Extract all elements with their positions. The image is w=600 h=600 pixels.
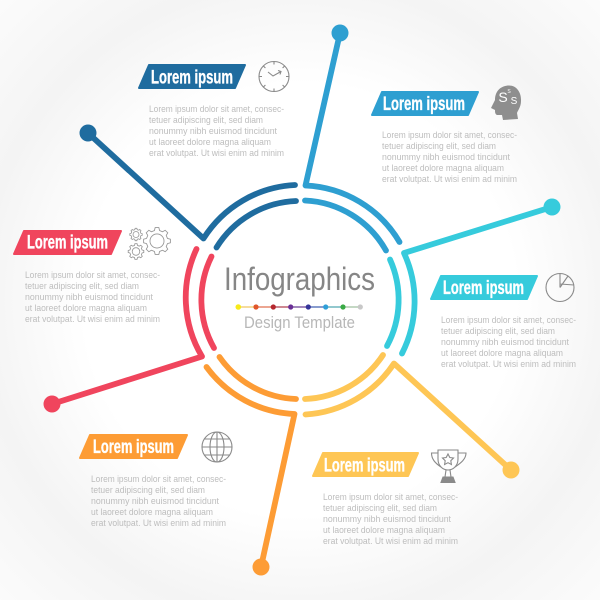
text block: [441, 315, 576, 370]
text block: nonummy nibh euismod tincidunt: [441, 337, 569, 348]
icon: gears: [128, 228, 170, 259]
text block: tetuer adipiscing elit, sed diam: [441, 326, 555, 337]
text block: Lorem ipsum dolor sit amet, consec-: [91, 474, 226, 485]
text block: Lorem ipsum dolor sit amet, consec-: [25, 270, 160, 281]
text block: erat volutpat. Ut wisi enim ad minim: [91, 518, 226, 529]
text block: [323, 492, 458, 547]
segment: dark blue: [88, 133, 296, 248]
icon: head with dollars: S: [507, 89, 511, 95]
text block: tetuer adipiscing elit, sed diam: [323, 503, 437, 514]
segment: yellow: [305, 355, 511, 470]
segment: blue: [305, 33, 400, 250]
icon: head with dollars: [491, 86, 521, 120]
text block: ut laoreet dolore magna aliquam: [323, 525, 445, 536]
banner: [14, 231, 121, 254]
panel: cyan: [431, 274, 576, 370]
subtitle: Design Template: [244, 314, 355, 332]
diagram: segmented circle: [52, 33, 552, 567]
text block: erat volutpat. Ut wisi enim ad minim: [323, 536, 458, 547]
banner: [372, 92, 478, 115]
icon: head with dollars: S: [511, 96, 518, 107]
text block: erat volutpat. Ut wisi enim ad minim: [382, 174, 517, 185]
dotted colour line: [236, 304, 363, 310]
banner: Lorem ipsum: [383, 94, 465, 115]
text block: Lorem ipsum dolor sit amet, consec-: [323, 492, 458, 503]
text block: ut laoreet dolore magna aliquam: [91, 507, 213, 518]
icon: clock: [259, 62, 289, 92]
text block: tetuer adipiscing elit, sed diam: [149, 115, 263, 126]
text block: Lorem ipsum dolor sit amet, consec-: [149, 104, 284, 115]
text block: [149, 104, 284, 159]
text block: tetuer adipiscing elit, sed diam: [382, 141, 496, 152]
text block: [25, 270, 160, 325]
banner: Lorem ipsum: [151, 68, 233, 88]
text block: tetuer adipiscing elit, sed diam: [25, 281, 139, 292]
panel: red: [14, 228, 170, 325]
text block: nonummy nibh euismod tincidunt: [323, 514, 451, 525]
text block: erat volutpat. Ut wisi enim ad minim: [441, 359, 576, 370]
text block: ut laoreet dolore magna aliquam: [25, 303, 147, 314]
banner: [431, 276, 537, 299]
text block: nonummy nibh euismod tincidunt: [149, 126, 277, 137]
text block: nonummy nibh euismod tincidunt: [25, 292, 153, 303]
icon: pie chart: [546, 274, 574, 302]
text block: ut laoreet dolore magna aliquam: [382, 163, 504, 174]
panel: orange: [80, 432, 232, 529]
banner: Lorem ipsum: [93, 437, 174, 458]
text block: [382, 130, 517, 185]
panel: dark blue: [139, 62, 289, 159]
title: Infographics: [224, 261, 375, 297]
icon: globe: [202, 432, 232, 462]
text block: tetuer adipiscing elit, sed diam: [91, 485, 205, 496]
end dots: [44, 24, 560, 576]
icon: head with dollars: S: [498, 89, 508, 105]
icon: trophy: [432, 450, 466, 482]
text block: erat volutpat. Ut wisi enim ad minim: [149, 148, 284, 159]
text block: ut laoreet dolore magna aliquam: [441, 348, 563, 359]
banner: [313, 453, 418, 476]
banner: Lorem ipsum: [27, 232, 108, 254]
panel: yellow: [313, 450, 466, 547]
banner: [80, 435, 187, 458]
segment: cyan: [387, 207, 552, 354]
text block: ut laoreet dolore magna aliquam: [149, 137, 271, 148]
banner: Lorem ipsum: [443, 278, 524, 299]
text block: [91, 474, 226, 529]
text block: erat volutpat. Ut wisi enim ad minim: [25, 314, 160, 325]
text block: nonummy nibh euismod tincidunt: [91, 496, 219, 507]
segment: orange: [206, 357, 296, 567]
panel: blue: [372, 86, 521, 185]
text block: Lorem ipsum dolor sit amet, consec-: [441, 315, 576, 326]
text block: Lorem ipsum dolor sit amet, consec-: [382, 130, 517, 141]
text block: nonummy nibh euismod tincidunt: [382, 152, 510, 163]
banner: Lorem ipsum: [324, 456, 405, 476]
banner: [139, 65, 245, 88]
segment: red: [52, 249, 214, 404]
